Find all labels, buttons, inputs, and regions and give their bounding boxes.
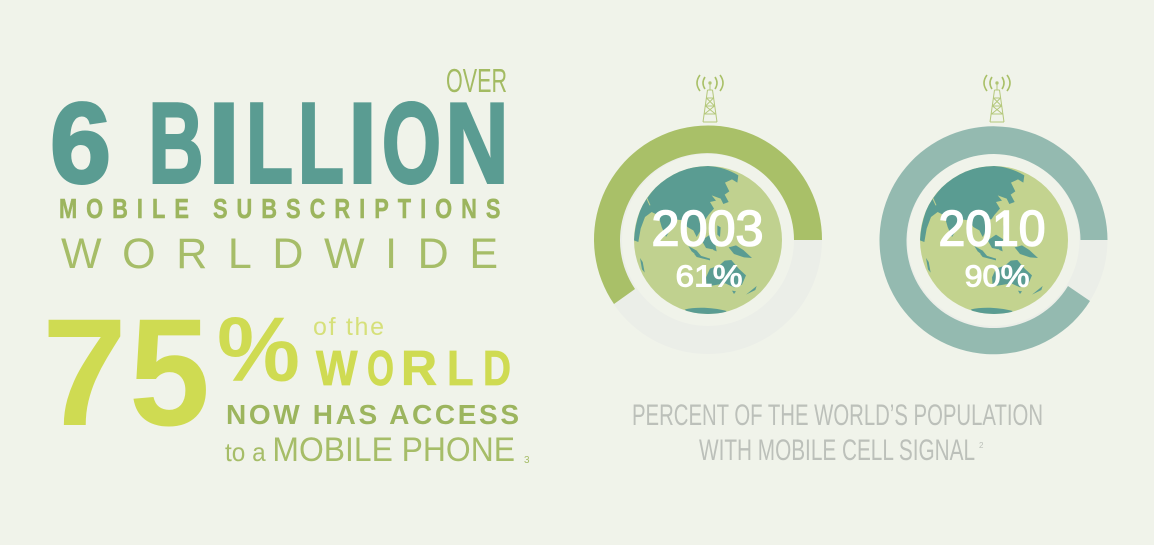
text: to a mobile phone: to a MOBILE PHONE: [225, 431, 515, 469]
text: mobile subscriptions: MOBILE SUBSCRIPTIONS: [59, 193, 500, 225]
ring track 2010: [894, 140, 1094, 340]
text: 75: 5: [129, 287, 210, 458]
text: 6 billion: L: [246, 80, 293, 208]
text: percent sign: %: [217, 299, 300, 401]
text: 6 billion: 6: [50, 80, 111, 208]
globe 2003: [634, 166, 782, 319]
text: 6 billion: [50, 80, 508, 208]
text: world: R: [401, 342, 437, 396]
text: world: O: [367, 342, 394, 396]
chart: 2003 signal coverage: [594, 75, 822, 340]
text: world: [316, 342, 511, 396]
text: footnote 2: 2: [979, 441, 984, 450]
text: 6 billion: I: [208, 80, 240, 208]
headline block: over 6 billion: [50, 62, 508, 278]
text: 6 billion: B: [148, 80, 204, 208]
text: of the: of the: [313, 313, 384, 341]
text: world: W: [316, 342, 358, 396]
text: 75: [42, 287, 210, 458]
text: 6 billion: I: [348, 80, 377, 208]
chart: 2010 signal coverage: [880, 75, 1108, 354]
icon: cell tower 2010: [984, 75, 1010, 122]
text: 61 percent: 61%: [676, 258, 742, 294]
icon: cell tower 2003: [697, 75, 723, 122]
text: 2010: 2010: [938, 200, 1046, 256]
ring arc 90 percent: [880, 126, 1108, 354]
text: 2003: 2003: [652, 200, 764, 256]
text: footnote 3: 3: [524, 455, 530, 466]
text: world: L: [447, 342, 474, 396]
text: 6 billion: O: [382, 80, 441, 208]
text: 6 billion: N: [446, 80, 508, 208]
text: 75: 7: [42, 287, 127, 458]
text: now has access: NOW HAS ACCESS: [226, 399, 519, 430]
text: over: OVER: [446, 62, 507, 99]
text: 90 percent: 90%: [964, 258, 1030, 294]
text: caption line 2: WITH MOBILE CELL SIGNAL: [699, 434, 975, 467]
ring arc 61 percent: [594, 126, 822, 304]
globe 2010: [920, 166, 1068, 319]
ring track 2003: [608, 140, 808, 340]
statistic block: 75 percent: [42, 287, 530, 469]
text: 6 billion: L: [298, 80, 344, 208]
text: worldwide: WORLDWIDE: [61, 230, 498, 278]
caption: percent of the world's population: [632, 399, 1043, 467]
text: world: D: [483, 342, 511, 396]
